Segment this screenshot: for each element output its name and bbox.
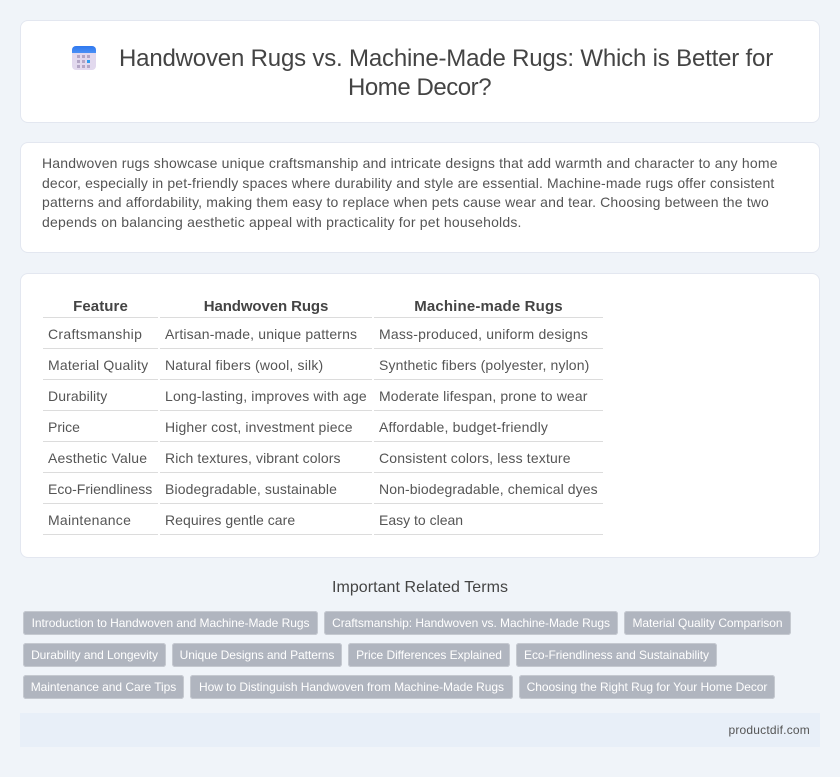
text block: description	[42, 155, 778, 230]
row: Price	[48, 419, 548, 435]
tag	[172, 643, 342, 667]
comparison table	[43, 298, 603, 535]
row: Craftsmanship: Artisan-made, unique patterns	[165, 326, 357, 342]
row: Maintenance	[48, 512, 463, 528]
row: Maintenance: Requires gentle care	[165, 512, 295, 528]
tag	[23, 611, 318, 635]
tag	[519, 675, 775, 699]
row: Price: Affordable, budget-friendly	[379, 419, 548, 435]
row: Maintenance: Maintenance	[48, 512, 131, 528]
tag: Introduction to Handwoven and Machine-Made Rugs	[32, 616, 309, 630]
tag: Eco-Friendliness and Sustainability	[524, 648, 709, 662]
tag	[23, 675, 184, 699]
tag: Price Differences Explained	[356, 648, 502, 662]
row: Durability: Long-lasting, improves with age	[165, 388, 367, 404]
row: Eco-Friendliness	[48, 481, 598, 497]
row: Aesthetic Value: Consistent colors, less texture	[379, 450, 571, 466]
header: Machine-made Rugs: Machine-made Rugs	[414, 298, 563, 315]
tag: Material Quality Comparison	[632, 616, 783, 630]
tag	[190, 675, 513, 699]
header: Handwoven Rugs: Handwoven Rugs	[204, 298, 328, 315]
tag	[348, 643, 510, 667]
row: Material Quality: Natural fibers (wool, silk)	[165, 357, 323, 373]
related terms tags	[23, 611, 791, 699]
tag: Craftsmanship: Handwoven vs. Machine-Made Rugs	[332, 616, 610, 630]
footer source: productdif.com	[728, 723, 810, 737]
tag	[324, 611, 618, 635]
title: Handwoven Rugs vs. Machine-Made Rugs: Which is Better for	[119, 45, 773, 72]
text block: description: patterns and affordability, making them easy to replace when pets cause wear and tear. Choosing between the two	[42, 194, 769, 210]
row: Maintenance: Easy to clean	[379, 512, 463, 528]
row: Eco-Friendliness: Non-biodegradable, chemical dyes	[379, 481, 598, 497]
row: Aesthetic Value: Aesthetic Value	[48, 450, 147, 466]
row: Eco-Friendliness: Eco-Friendliness	[48, 481, 152, 497]
row: Craftsmanship	[48, 326, 588, 342]
tag: Unique Designs and Patterns	[180, 648, 334, 662]
tag	[516, 643, 717, 667]
tag: Maintenance and Care Tips	[31, 680, 176, 694]
heading: related terms: Important Related Terms	[332, 579, 508, 596]
tag	[624, 611, 791, 635]
row: Craftsmanship: Mass-produced, uniform designs	[379, 326, 588, 342]
row: Material Quality	[48, 357, 589, 373]
title: Home Decor?	[348, 74, 491, 101]
row: Price: Higher cost, investment piece	[165, 419, 353, 435]
row: Durability: Moderate lifespan, prone to wear	[379, 388, 588, 404]
row: Price: Price	[48, 419, 80, 435]
title	[119, 45, 773, 101]
row: Craftsmanship: Craftsmanship	[48, 326, 142, 342]
row: Eco-Friendliness: Biodegradable, sustainable	[165, 481, 337, 497]
panel: comparison table	[20, 273, 820, 558]
row: Durability: Durability	[48, 388, 107, 404]
row: Material Quality: Synthetic fibers (polyester, nylon)	[379, 357, 589, 373]
text block: description: decor, especially in pet-friendly spaces where durability and style are essential. Machine-made rugs offer consistent	[42, 175, 774, 191]
header: Feature: Feature	[73, 298, 128, 315]
footer bar	[20, 713, 820, 747]
text block: description: depends on balancing aesthetic appeal with practicality for pet households.	[42, 214, 522, 230]
panel: title header	[20, 20, 820, 123]
row: Material Quality: Material Quality	[48, 357, 148, 373]
row: Durability	[48, 388, 588, 404]
icon: calendar	[72, 46, 96, 70]
tag: Choosing the Right Rug for Your Home Decor	[527, 680, 767, 694]
text block: description: Handwoven rugs showcase unique craftsmanship and intricate designs that add warmth and character to any home	[42, 155, 778, 171]
row: Aesthetic Value: Rich textures, vibrant colors	[165, 450, 341, 466]
tag: Durability and Longevity	[31, 648, 158, 662]
row: Aesthetic Value	[48, 450, 571, 466]
tag	[23, 643, 166, 667]
panel: description	[20, 142, 820, 253]
tag: How to Distinguish Handwoven from Machine-Made Rugs	[199, 680, 504, 694]
